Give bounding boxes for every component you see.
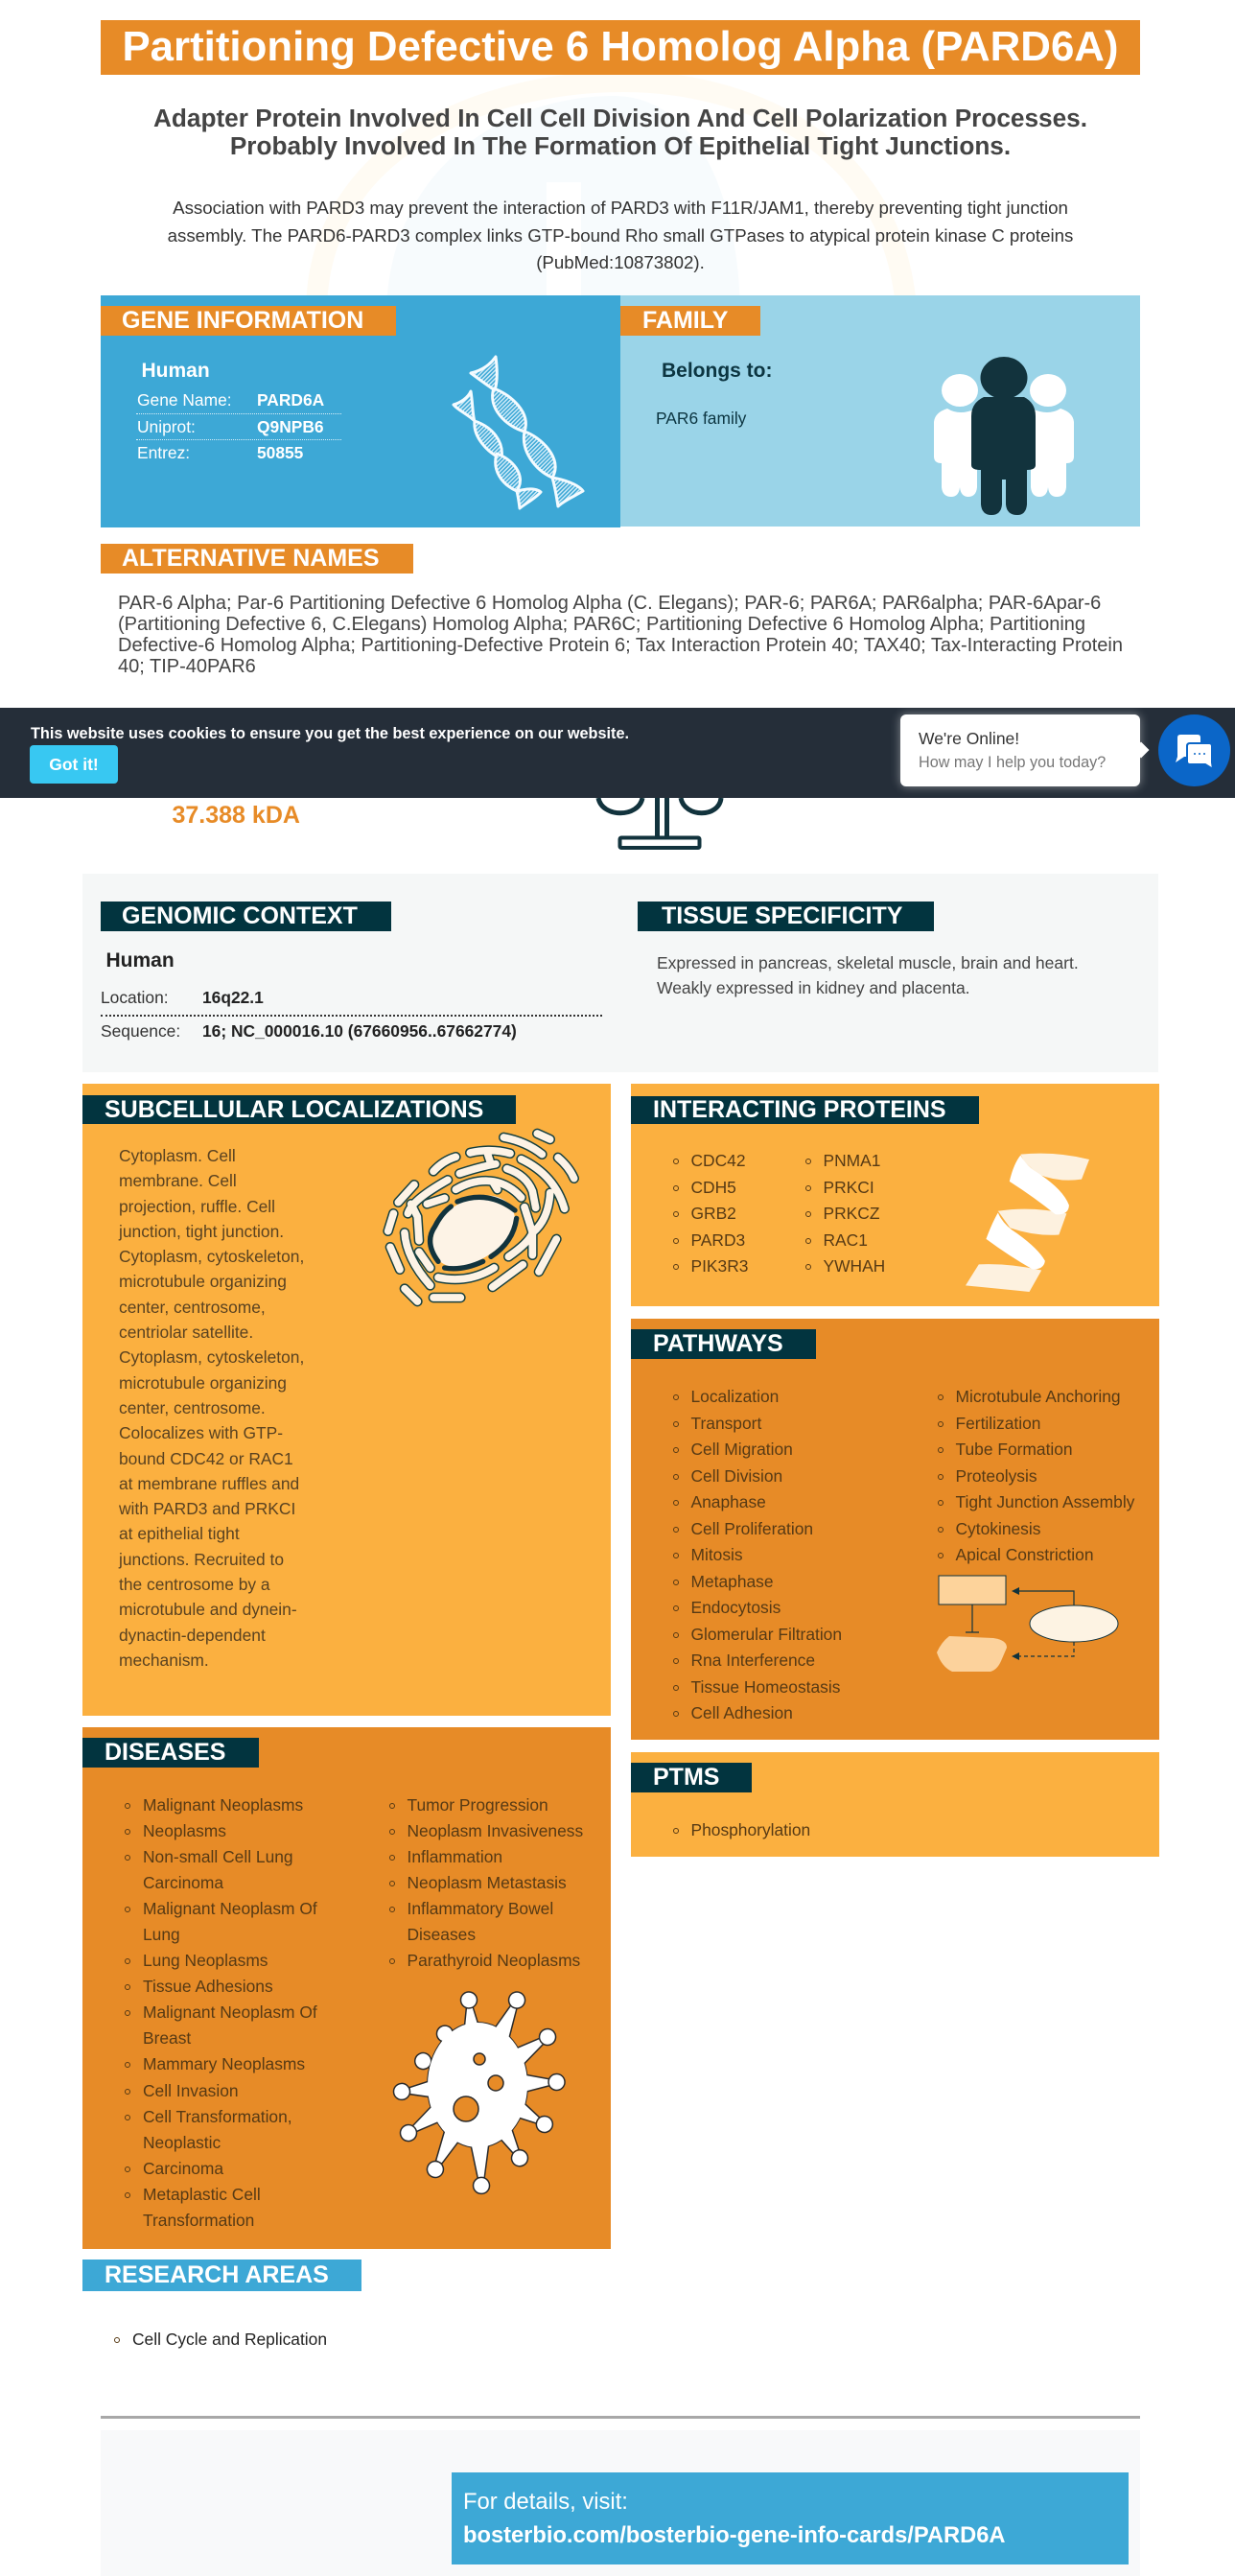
- localization text: Cytoplasm, cytoskeleton,: [119, 1247, 304, 1266]
- localization text: with PARD3 and PRKCI: [119, 1499, 295, 1518]
- cookie button: Got it!: [49, 755, 99, 774]
- localization text: Colocalizes with GTP-: [119, 1423, 283, 1442]
- protein list column 1: PIK3R3: [690, 1256, 748, 1276]
- heading: pathways: PATHWAYS: [653, 1330, 783, 1357]
- icon: balance scale: [596, 798, 723, 850]
- protein list column 1: CDC42: [690, 1151, 746, 1170]
- panel: genomic context and tissue specificity: [82, 874, 1158, 1072]
- gene name row: Gene Name:: [137, 390, 232, 410]
- heading: interacting proteins: INTERACTING PROTEINS: [653, 1096, 946, 1123]
- disease list column 2: Inflammatory Bowel: [407, 1899, 553, 1918]
- uniprot row: Q9NPB6: [257, 417, 324, 436]
- description paragraph: Association with PARD3 may prevent the interaction of PARD3 with F11R/JAM1, thereby preventing tight junction: [173, 198, 1068, 218]
- protein list column 1: PARD3: [690, 1229, 745, 1249]
- localization text: microtubule organizing: [119, 1272, 287, 1291]
- protein list column 1: CDH5: [690, 1178, 736, 1197]
- disease list column 1: Lung Neoplasms: [143, 1951, 268, 1970]
- entrez row: Entrez:: [137, 443, 190, 462]
- research area list: Cell Cycle and Replication: [132, 2330, 327, 2349]
- heading: diseases: [82, 1738, 259, 1768]
- protein list column 1: [673, 1151, 748, 1276]
- panel: subcellular localizations: [82, 1084, 611, 1716]
- belongs to label: Belongs to:: [662, 360, 773, 382]
- chat heading: We're Online!: [919, 729, 1019, 748]
- disease list column 2: Tumor Progression: [407, 1795, 548, 1815]
- icon: chat button: [1158, 714, 1230, 786]
- localization text: microtubule and dynein-: [119, 1600, 297, 1619]
- icon: dna: [452, 355, 585, 510]
- pathway list column 1: Endocytosis: [690, 1598, 781, 1617]
- alternative names text: Defective-6 Homolog Alpha; Partitioning-Defective Protein 6; Tax Interaction Protein 40; TAX40; Tax-Interacting Protein: [118, 635, 1123, 656]
- localization text: [119, 1146, 304, 1670]
- disease list column 1: Carcinoma: [143, 1873, 223, 1892]
- disease list column 1: Lung: [143, 1925, 180, 1944]
- disease list column 1: Mammary Neoplasms: [143, 2054, 305, 2073]
- pathway list column 1: Cell Division: [690, 1465, 782, 1485]
- pathway list column 1: Glomerular Filtration: [690, 1625, 842, 1644]
- pathway list column 2: Proteolysis: [955, 1465, 1037, 1485]
- uniprot row: Uniprot:: [137, 417, 196, 436]
- pathway list column 2: [938, 1387, 1135, 1564]
- pathway list column 2: Fertilization: [955, 1414, 1040, 1433]
- heading: subcellular localizations: SUBCELLULAR LOCALIZATIONS: [105, 1096, 483, 1123]
- pathway list column 2: Apical Constriction: [955, 1545, 1094, 1564]
- location row: 16q22.1: [202, 988, 264, 1007]
- pathway list column 2: Tight Junction Assembly: [955, 1492, 1134, 1511]
- localization text: dynactin-dependent: [119, 1626, 266, 1645]
- panel: diseases: [82, 1727, 611, 2249]
- sequence row: 16; NC_000016.10 (67660956..67662774): [202, 1021, 517, 1041]
- panel: ptms: [631, 1752, 1159, 1857]
- protein list column 2: [805, 1151, 885, 1276]
- pathway list column 1: Rna Interference: [690, 1651, 815, 1670]
- disease list column 2: Parathyroid Neoplasms: [407, 1951, 580, 1970]
- subtitle: [153, 104, 1087, 160]
- panel: gene information: [101, 295, 620, 527]
- protein list column 2: YWHAH: [823, 1256, 885, 1276]
- pathway list column 1: Transport: [690, 1414, 761, 1433]
- disease list column 1: Cell Transformation,: [143, 2107, 292, 2126]
- protein list column 2: PRKCZ: [823, 1204, 879, 1223]
- disease list column 1: Non-small Cell Lung: [143, 1847, 293, 1866]
- localization text: center, centrosome,: [119, 1298, 266, 1317]
- molecular mass value: 37.388 kDA: [173, 802, 300, 829]
- cookie message: This website uses cookies to ensure you get the best experience on our website.: [31, 725, 629, 742]
- pathway list column 1: Anaphase: [690, 1492, 766, 1511]
- localization text: the centrosome by a: [119, 1575, 270, 1594]
- pathway list column 2: Tube Formation: [955, 1440, 1073, 1459]
- subtitle: Probably Involved In The Formation Of Epithelial Tight Junctions.: [230, 131, 1011, 160]
- disease list column 1: Carcinoma: [143, 2159, 223, 2178]
- heading: alternative names: ALTERNATIVE NAMES: [122, 545, 380, 572]
- disease list column 2: Diseases: [407, 1925, 476, 1944]
- entrez row: 50855: [257, 443, 303, 462]
- icon: pathway diagram: [937, 1575, 1118, 1672]
- localization text: projection, ruffle. Cell: [119, 1197, 275, 1216]
- chat bubble: [900, 714, 1140, 786]
- details label: For details, visit:: [463, 2489, 628, 2515]
- alternative names text: 40; TIP-40PAR6: [118, 656, 256, 677]
- heading: tissue specificity: TISSUE SPECIFICITY: [662, 902, 902, 929]
- pathway list column 1: Localization: [690, 1387, 779, 1406]
- alternative names text: PAR-6 Alpha; Par-6 Partitioning Defective 6 Homolog Alpha (C. Elegans); PAR-6; PAR6A; PAR6alpha; PAR-6Apar-6: [118, 593, 1101, 614]
- ptm list: Phosphorylation: [690, 1820, 810, 1839]
- heading: ptms: [631, 1763, 752, 1792]
- protein list column 2: PNMA1: [823, 1151, 880, 1170]
- disease list column 1: Breast: [143, 2028, 191, 2048]
- pathway list column 1: Cell Proliferation: [690, 1519, 813, 1538]
- location row: Location:: [101, 988, 169, 1007]
- icon: people: [934, 357, 1074, 515]
- localization text: junction, tight junction.: [119, 1222, 284, 1241]
- localization text: at epithelial tight: [119, 1524, 240, 1543]
- pathway list column 1: [673, 1387, 842, 1722]
- localization text: bound CDC42 or RAC1: [119, 1449, 293, 1468]
- disease list column 2: Neoplasm Metastasis: [407, 1873, 567, 1892]
- heading: genomic context: GENOMIC CONTEXT: [122, 902, 358, 929]
- icon: virus: [393, 1991, 566, 2194]
- heading: family: [620, 306, 760, 336]
- tissue specificity text: Expressed in pancreas, skeletal muscle, brain and heart.: [657, 953, 1079, 972]
- protein list column 2: RAC1: [823, 1229, 868, 1249]
- panel: pathways: [631, 1319, 1159, 1740]
- callout: details link: [452, 2472, 1129, 2564]
- description paragraph: assembly. The PARD6-PARD3 complex links GTP-bound Rho small GTPases to atypical protein kinase C proteins: [168, 225, 1073, 246]
- heading: family: FAMILY: [642, 307, 728, 334]
- tissue specificity text: Weakly expressed in kidney and placenta.: [657, 978, 970, 997]
- heading: research areas: [82, 2260, 361, 2291]
- disease list column 1: Malignant Neoplasms: [143, 1795, 303, 1815]
- chat bubble pointer: [1133, 742, 1149, 758]
- gene name row: [136, 387, 341, 414]
- species label: Human: [105, 949, 175, 972]
- localization text: microtubule organizing: [119, 1373, 287, 1393]
- icon: organelle: [383, 1128, 579, 1306]
- disease list column 1: Tissue Adhesions: [143, 1977, 273, 1996]
- pathway list column 1: Cell Migration: [690, 1440, 793, 1459]
- panel: family: [620, 295, 1140, 527]
- subtitle: Adapter Protein Involved In Cell Cell Division And Cell Polarization Processes.: [153, 104, 1087, 132]
- disease list column 1: Neoplastic: [143, 2133, 221, 2152]
- faint background watermark: [307, 75, 915, 295]
- heading: pathways: [631, 1329, 816, 1359]
- disease list column 1: Neoplasms: [143, 1821, 226, 1840]
- localization text: Cytoplasm. Cell: [119, 1146, 236, 1165]
- protein list column 2: PRKCI: [823, 1178, 874, 1197]
- pathway list column 1: Metaphase: [690, 1571, 774, 1590]
- heading: research areas: RESEARCH AREAS: [105, 2261, 329, 2288]
- localization text: junctions. Recruited to: [119, 1550, 284, 1569]
- title: Partitioning Defective 6 Homolog Alpha (PARD6A): [122, 23, 1119, 70]
- pathway list column 1: Cell Adhesion: [690, 1703, 793, 1722]
- details url: bosterbio.com/bosterbio-gene-info-cards/PARD6A: [463, 2523, 1005, 2548]
- protein list column 1: GRB2: [690, 1204, 736, 1223]
- localization text: centriolar satellite.: [119, 1323, 253, 1342]
- chat subtext: How may I help you today?: [919, 754, 1106, 771]
- alternative names text: (Partitioning Defective 6, C.Elegans) Homolog Alpha; PAR6C; Partitioning Defective 6 Homolog Alpha; Partitioning: [118, 614, 1085, 635]
- panel: interacting proteins: [631, 1084, 1159, 1306]
- disease list column 1: Malignant Neoplasm Of: [143, 1899, 317, 1918]
- entrez row: [137, 443, 303, 462]
- localization text: center, centrosome.: [119, 1398, 266, 1417]
- heading: ptms: PTMS: [653, 1764, 719, 1791]
- icon: protein ribbon: [966, 1153, 1089, 1292]
- pathway list column 2: Microtubule Anchoring: [955, 1387, 1121, 1406]
- localization text: Cytoplasm, cytoskeleton,: [119, 1347, 304, 1367]
- disease list column 1: Transformation: [143, 2211, 254, 2230]
- pathway list column 1: Mitosis: [690, 1545, 743, 1564]
- disease list column 1: Cell Invasion: [143, 2081, 239, 2100]
- tissue specificity text: [657, 953, 1079, 997]
- pathway list column 1: Tissue Homeostasis: [690, 1676, 840, 1696]
- divider: [101, 2416, 1140, 2419]
- disease list column 1: [125, 1795, 317, 2230]
- cookie banner: [0, 708, 1235, 798]
- disease list column 1: Malignant Neoplasm Of: [143, 2002, 317, 2022]
- heading: diseases: DISEASES: [105, 1739, 225, 1766]
- disease list column 2: Neoplasm Invasiveness: [407, 1821, 583, 1840]
- pathway list column 2: Cytokinesis: [955, 1519, 1040, 1538]
- species label: Human: [142, 360, 210, 382]
- disease list column 1: Metaplastic Cell: [143, 2185, 261, 2204]
- heading: gene information: GENE INFORMATION: [122, 307, 363, 334]
- location row: [101, 985, 602, 1017]
- section: alternative names: [101, 544, 1123, 677]
- disease list column 2: Inflammation: [407, 1847, 502, 1866]
- uniprot row: [136, 414, 341, 440]
- description paragraph: (PubMed:10873802).: [536, 252, 705, 272]
- family name: PAR6 family: [656, 409, 746, 428]
- localization text: at membrane ruffles and: [119, 1474, 299, 1493]
- description paragraph: [168, 198, 1073, 272]
- localization text: membrane. Cell: [119, 1171, 237, 1190]
- localization text: mechanism.: [119, 1651, 209, 1670]
- cookie button: [30, 745, 118, 784]
- section: research areas: [82, 2260, 361, 2349]
- sequence row: Sequence:: [101, 1021, 180, 1041]
- footer panel: [101, 2430, 1140, 2576]
- disease list column 2: [389, 1795, 583, 1970]
- gene name row: PARD6A: [257, 390, 324, 410]
- alternative names text: [118, 593, 1123, 677]
